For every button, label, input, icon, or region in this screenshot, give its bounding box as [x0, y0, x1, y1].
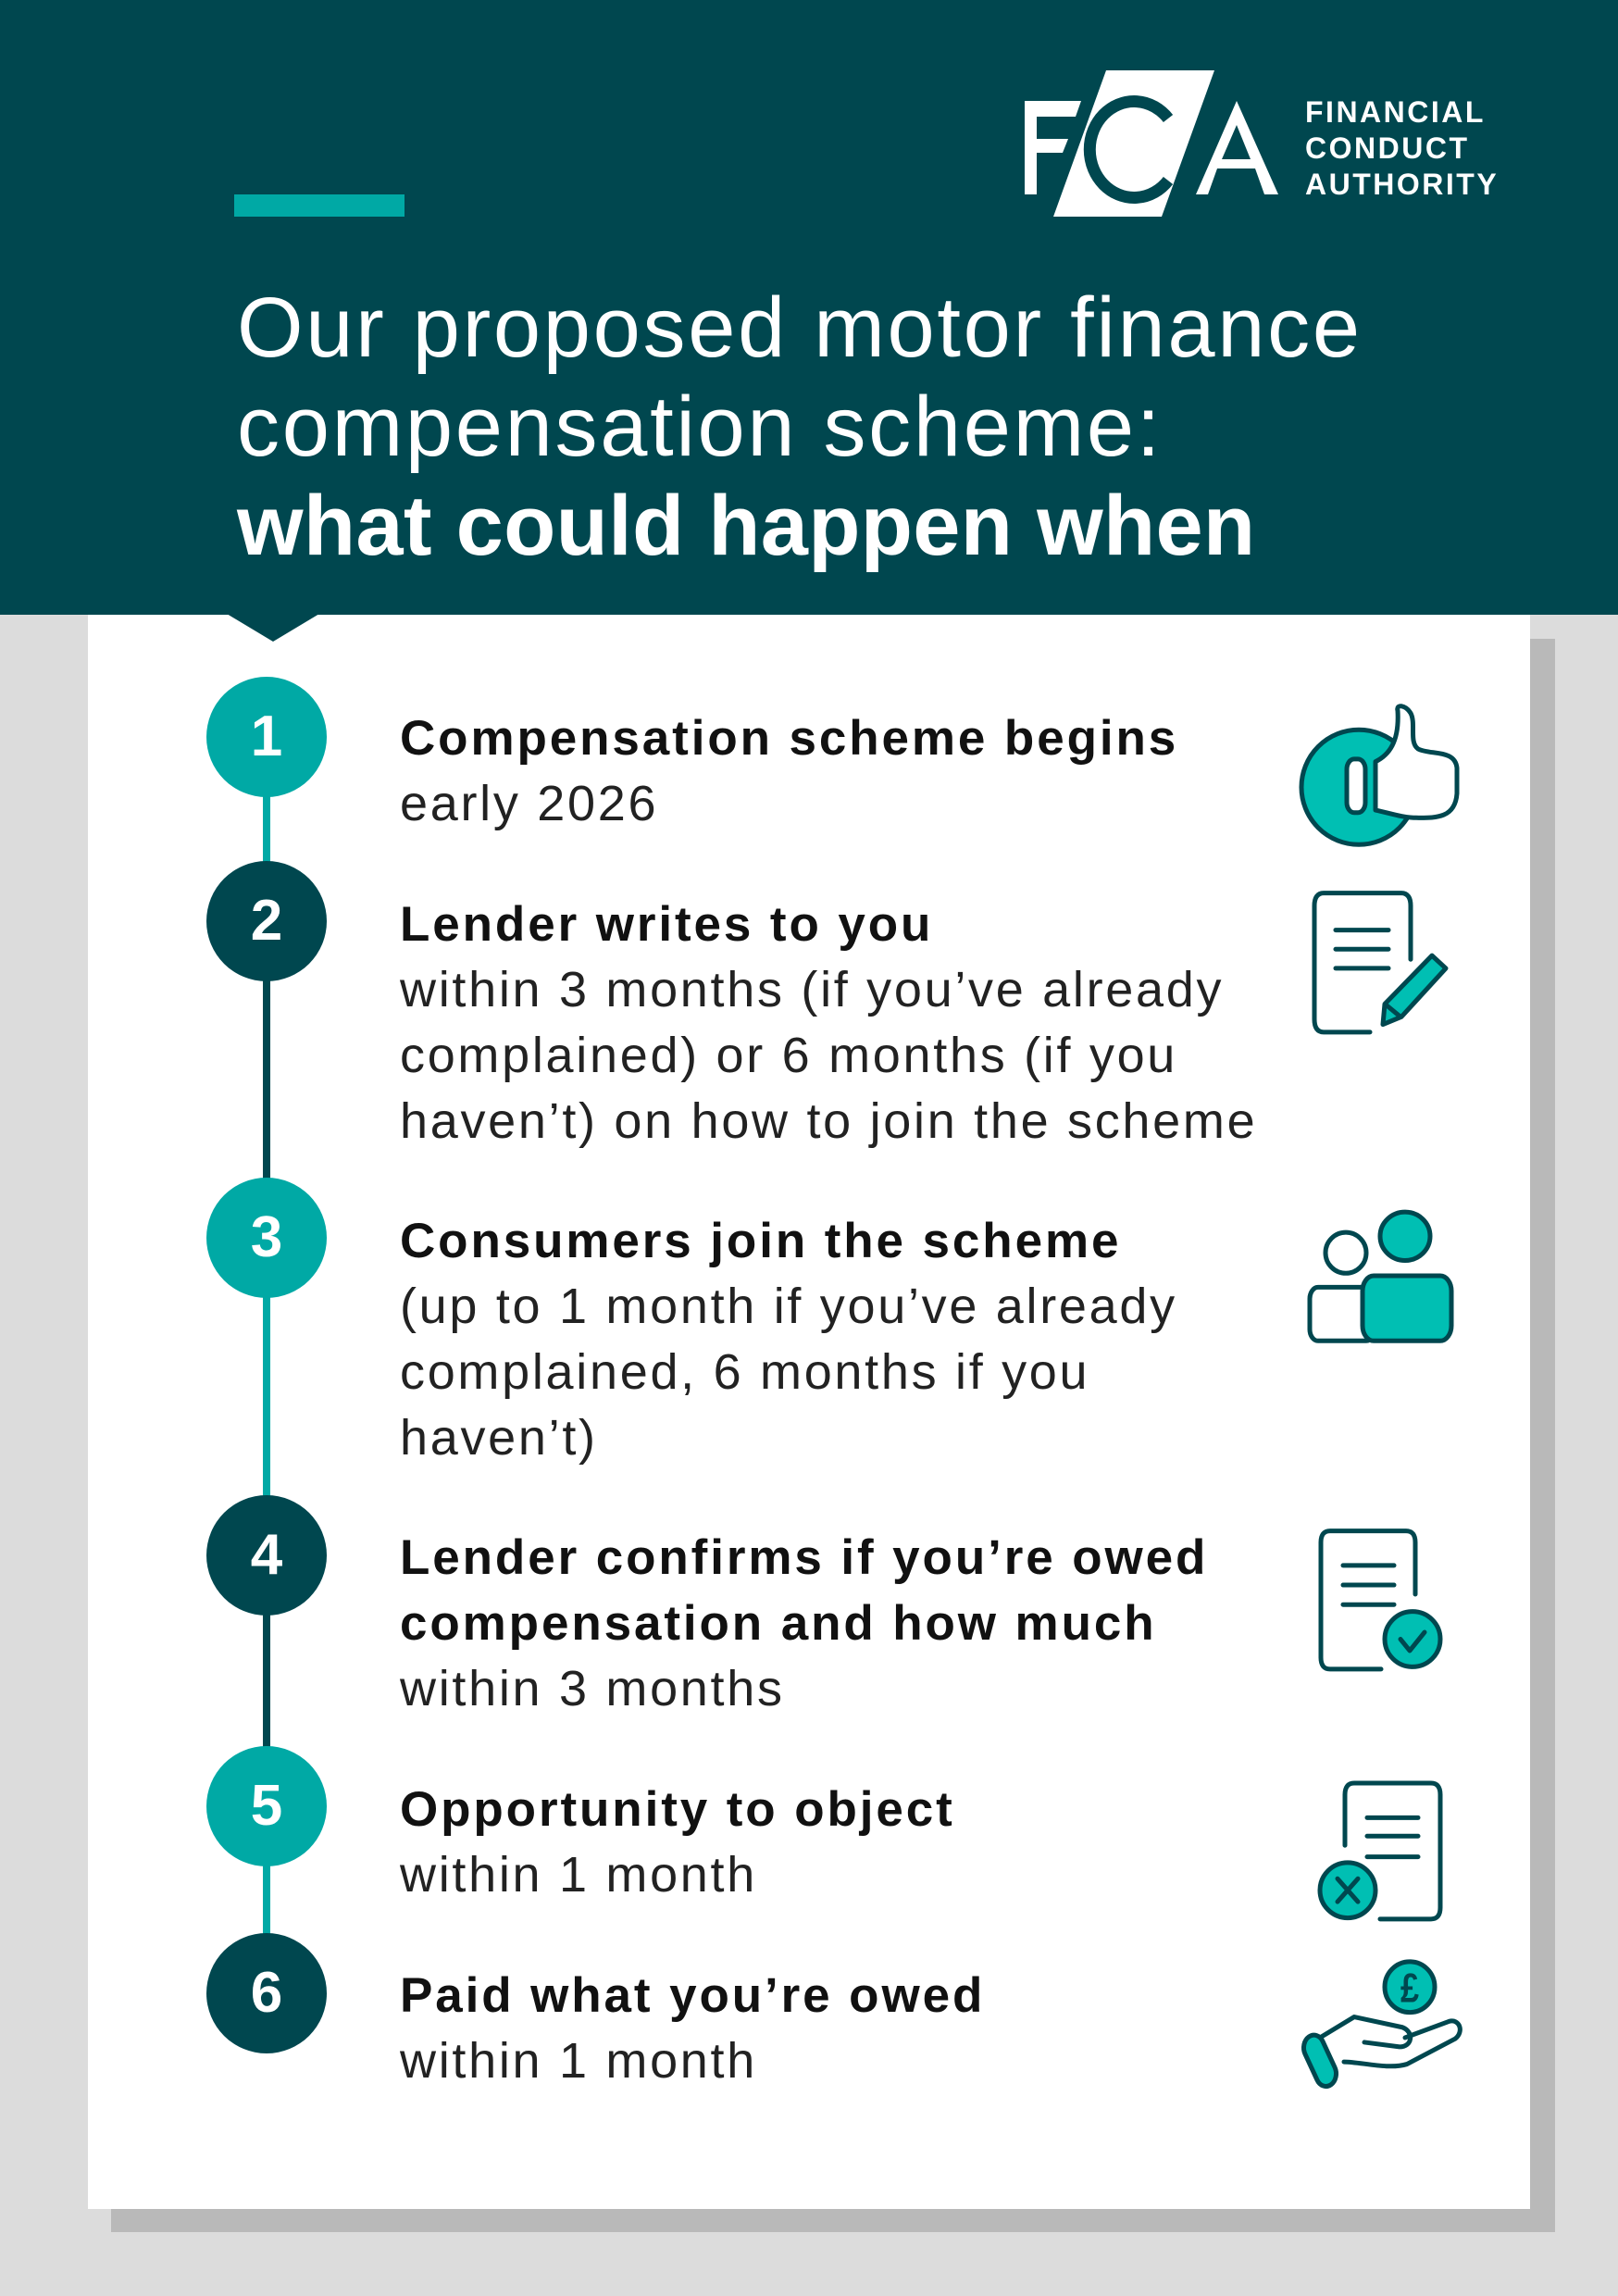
step 2 text [400, 897, 1257, 1149]
step 5 text [400, 1782, 955, 1903]
icon: document with pencil [1314, 893, 1446, 1032]
title: Our proposed motor finance [237, 281, 1363, 375]
step 3 text: (up to 1 month if you’ve already [400, 1279, 1177, 1334]
logo [1025, 70, 1499, 217]
step 2 number: 2 [251, 889, 282, 953]
step 3 text: haven’t) [400, 1410, 598, 1466]
logo: CONDUCT [1305, 131, 1469, 165]
step 4 text: Lender confirms if you’re owed [400, 1530, 1208, 1585]
step 1 text: early 2026 [400, 776, 658, 831]
title: what could happen when [237, 479, 1255, 573]
step 3 text: complained, 6 months if you [400, 1344, 1089, 1400]
step 3 text [400, 1214, 1177, 1466]
step 4 number: 4 [251, 1523, 282, 1587]
icon: hand with pound coin: £ [1400, 1965, 1419, 2011]
step 2 text: Lender writes to you [400, 897, 933, 952]
step 5 text: within 1 month [400, 1847, 757, 1903]
step 3 number: 3 [251, 1205, 282, 1269]
card shadow [111, 639, 1555, 2232]
accent bar [234, 194, 404, 217]
step 6 number: 6 [251, 1961, 282, 2025]
logo: AUTHORITY [1305, 168, 1499, 201]
icon: people [1310, 1212, 1451, 1341]
step 2 text: haven’t) on how to join the scheme [400, 1093, 1257, 1149]
step 6 text: Paid what you’re owed [400, 1968, 985, 2023]
step 5 number: 5 [251, 1774, 282, 1838]
step 6 text [400, 1968, 985, 2089]
icons [1300, 704, 1462, 2089]
title [237, 281, 1363, 573]
step 5 number [206, 1746, 327, 1866]
title: compensation scheme: [237, 380, 1163, 474]
header [0, 0, 1618, 615]
step 1 text: Compensation scheme begins [400, 711, 1178, 766]
step 4 text [400, 1530, 1208, 1716]
icon: document with cross [1320, 1783, 1440, 1919]
step 2 number [206, 861, 327, 981]
step 1 number [206, 677, 327, 797]
step 1 text [400, 711, 1178, 831]
timeline connector [263, 796, 270, 1933]
step 3 number [206, 1178, 327, 1298]
icon: thumbs up [1301, 706, 1457, 844]
step 2 text: within 3 months (if you’ve already [400, 962, 1224, 1017]
step 4 text: compensation and how much [400, 1596, 1157, 1651]
logo: FINANCIAL [1305, 95, 1486, 129]
step 6 number [206, 1933, 327, 2053]
icon: document with tick [1321, 1531, 1440, 1669]
step 3 text: Consumers join the scheme [400, 1214, 1121, 1268]
step 4 text: within 3 months [400, 1661, 785, 1716]
white card [88, 611, 1530, 2209]
step 1 number: 1 [251, 705, 282, 768]
step 6 text: within 1 month [400, 2033, 757, 2089]
step 4 number [206, 1495, 327, 1616]
step 5 text: Opportunity to object [400, 1782, 955, 1837]
pointer triangle [227, 614, 319, 642]
step 2 text: complained) or 6 months (if you [400, 1028, 1177, 1083]
icon: hand with pound coin [1300, 1962, 1460, 2091]
